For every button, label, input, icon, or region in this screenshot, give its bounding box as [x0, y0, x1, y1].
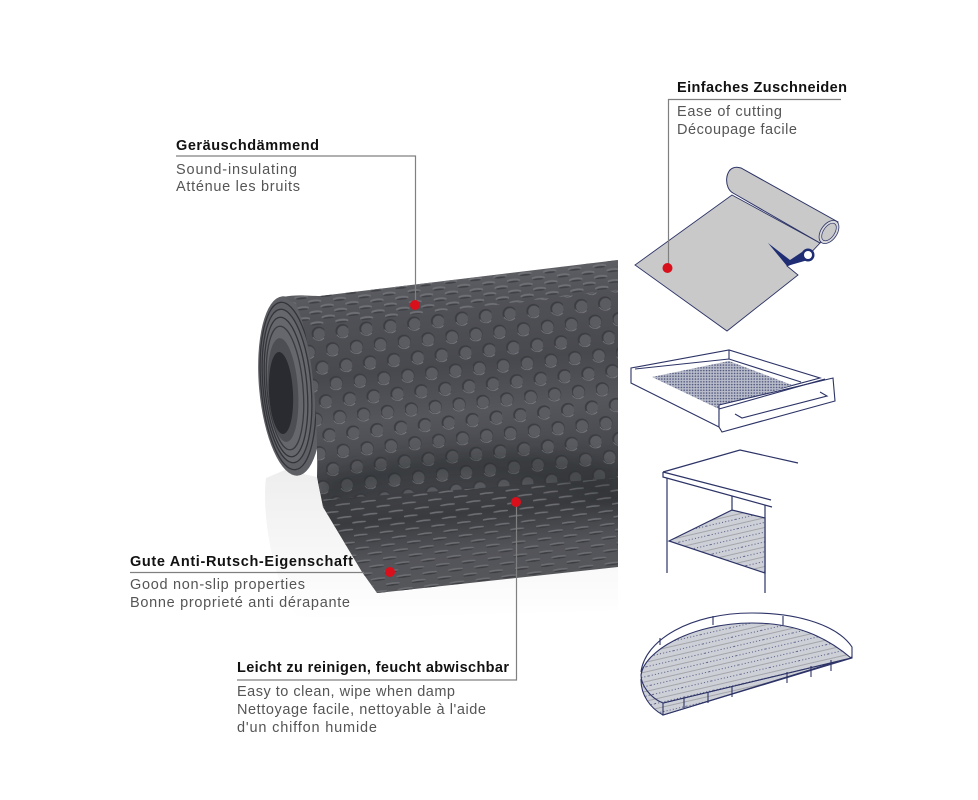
lower flat bubbles	[316, 478, 618, 596]
illustration: drawer with liner	[631, 350, 835, 432]
callout: Gute Anti-Rutsch-Eigenschaft	[130, 554, 395, 611]
illustration: shelf with liner	[663, 450, 798, 593]
callout: Einfaches Zuschneiden: Ease of cutting	[677, 104, 782, 120]
callout: Gute Anti-Rutsch-Eigenschaft: Bonne proprieté anti dérapante	[130, 595, 350, 611]
callout: Einfaches Zuschneiden: Découpage facile	[677, 122, 797, 138]
callout: Leicht zu reinigen: Nettoyage facile, nettoyable à l'aide	[237, 702, 486, 718]
base front	[641, 657, 852, 715]
illustration: cutting the mat with scissors	[635, 167, 843, 331]
callout: Leicht zu reinigen: d'un chiffon humide	[237, 720, 377, 736]
roll end with spiral layers	[251, 294, 329, 478]
callout: Geräuschdämmend: Sound-insulating	[176, 162, 297, 178]
callout: Geräuschdämmend	[176, 138, 420, 310]
drawer liner	[652, 361, 792, 409]
outer rim	[641, 613, 852, 715]
middle round bubbles	[300, 290, 618, 500]
shelf liner	[669, 510, 765, 573]
callout: Geräuschdämmend: Geräuschdämmend	[176, 138, 319, 154]
mat sheet surface	[283, 260, 618, 593]
flat sheet	[635, 195, 820, 331]
drawer handle	[735, 392, 827, 418]
callout: Geräuschdämmend: Atténue les bruits	[176, 179, 300, 195]
callout: Einfaches Zuschneiden: Einfaches Zuschneiden	[677, 80, 847, 96]
fold shadow band	[320, 451, 618, 505]
callout: Leicht zu reinigen: Leicht zu reinigen, feucht abwischbar	[237, 660, 509, 676]
callout: Einfaches Zuschneiden	[662, 80, 847, 273]
upper flattened bubbles	[285, 260, 618, 328]
photo: rolled anti-slip mat	[251, 260, 618, 596]
callout: Leicht zu reinigen: Easy to clean, wipe when damp	[237, 684, 455, 700]
drawer front panel	[719, 378, 835, 432]
illustration: semicircular corner unit with liner	[641, 613, 852, 715]
callout: Leicht zu reinigen	[237, 497, 521, 736]
callout: Gute Anti-Rutsch-Eigenschaft: Good non-slip properties	[130, 577, 305, 593]
bubble texture and fold shading	[285, 260, 618, 596]
rolled end	[727, 167, 843, 247]
icon: scissors	[768, 243, 814, 266]
liner surface	[641, 623, 851, 703]
callout: Gute Anti-Rutsch-Eigenschaft: Gute Anti-Rutsch-Eigenschaft	[130, 554, 353, 570]
floor reflection under the roll	[265, 470, 618, 620]
